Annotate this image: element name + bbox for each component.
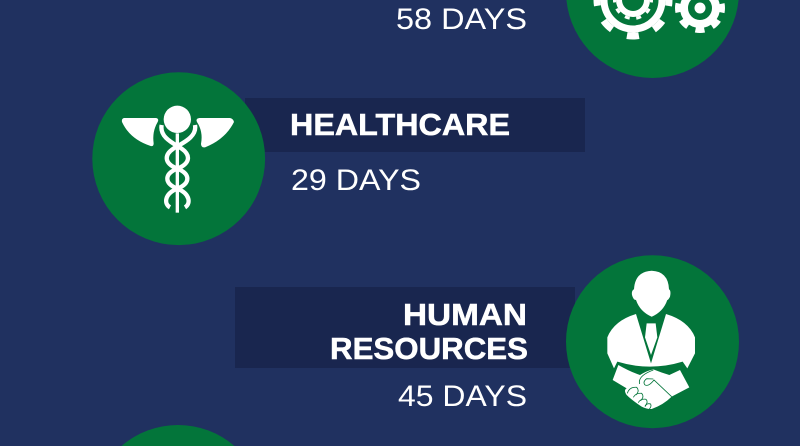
label: 45 days: 45 DAYS (398, 380, 527, 413)
human resources heading (330, 297, 528, 366)
icon: caduceus in green circle (92, 72, 265, 245)
human resources heading bar (235, 287, 575, 368)
human resources heading: RESOURCES (330, 331, 528, 366)
healthcare heading bar (245, 98, 585, 152)
icon: partial green circle at bottom (122, 425, 234, 446)
icon: gears in green circle (566, 0, 739, 78)
label: 58 days: 58 DAYS (396, 3, 527, 36)
label: 29 days: 29 DAYS (291, 164, 421, 197)
icon: businessman handshake in green circle (566, 255, 739, 428)
healthcare heading: HEALTHCARE (290, 107, 510, 142)
human resources heading: HUMAN (403, 297, 527, 332)
